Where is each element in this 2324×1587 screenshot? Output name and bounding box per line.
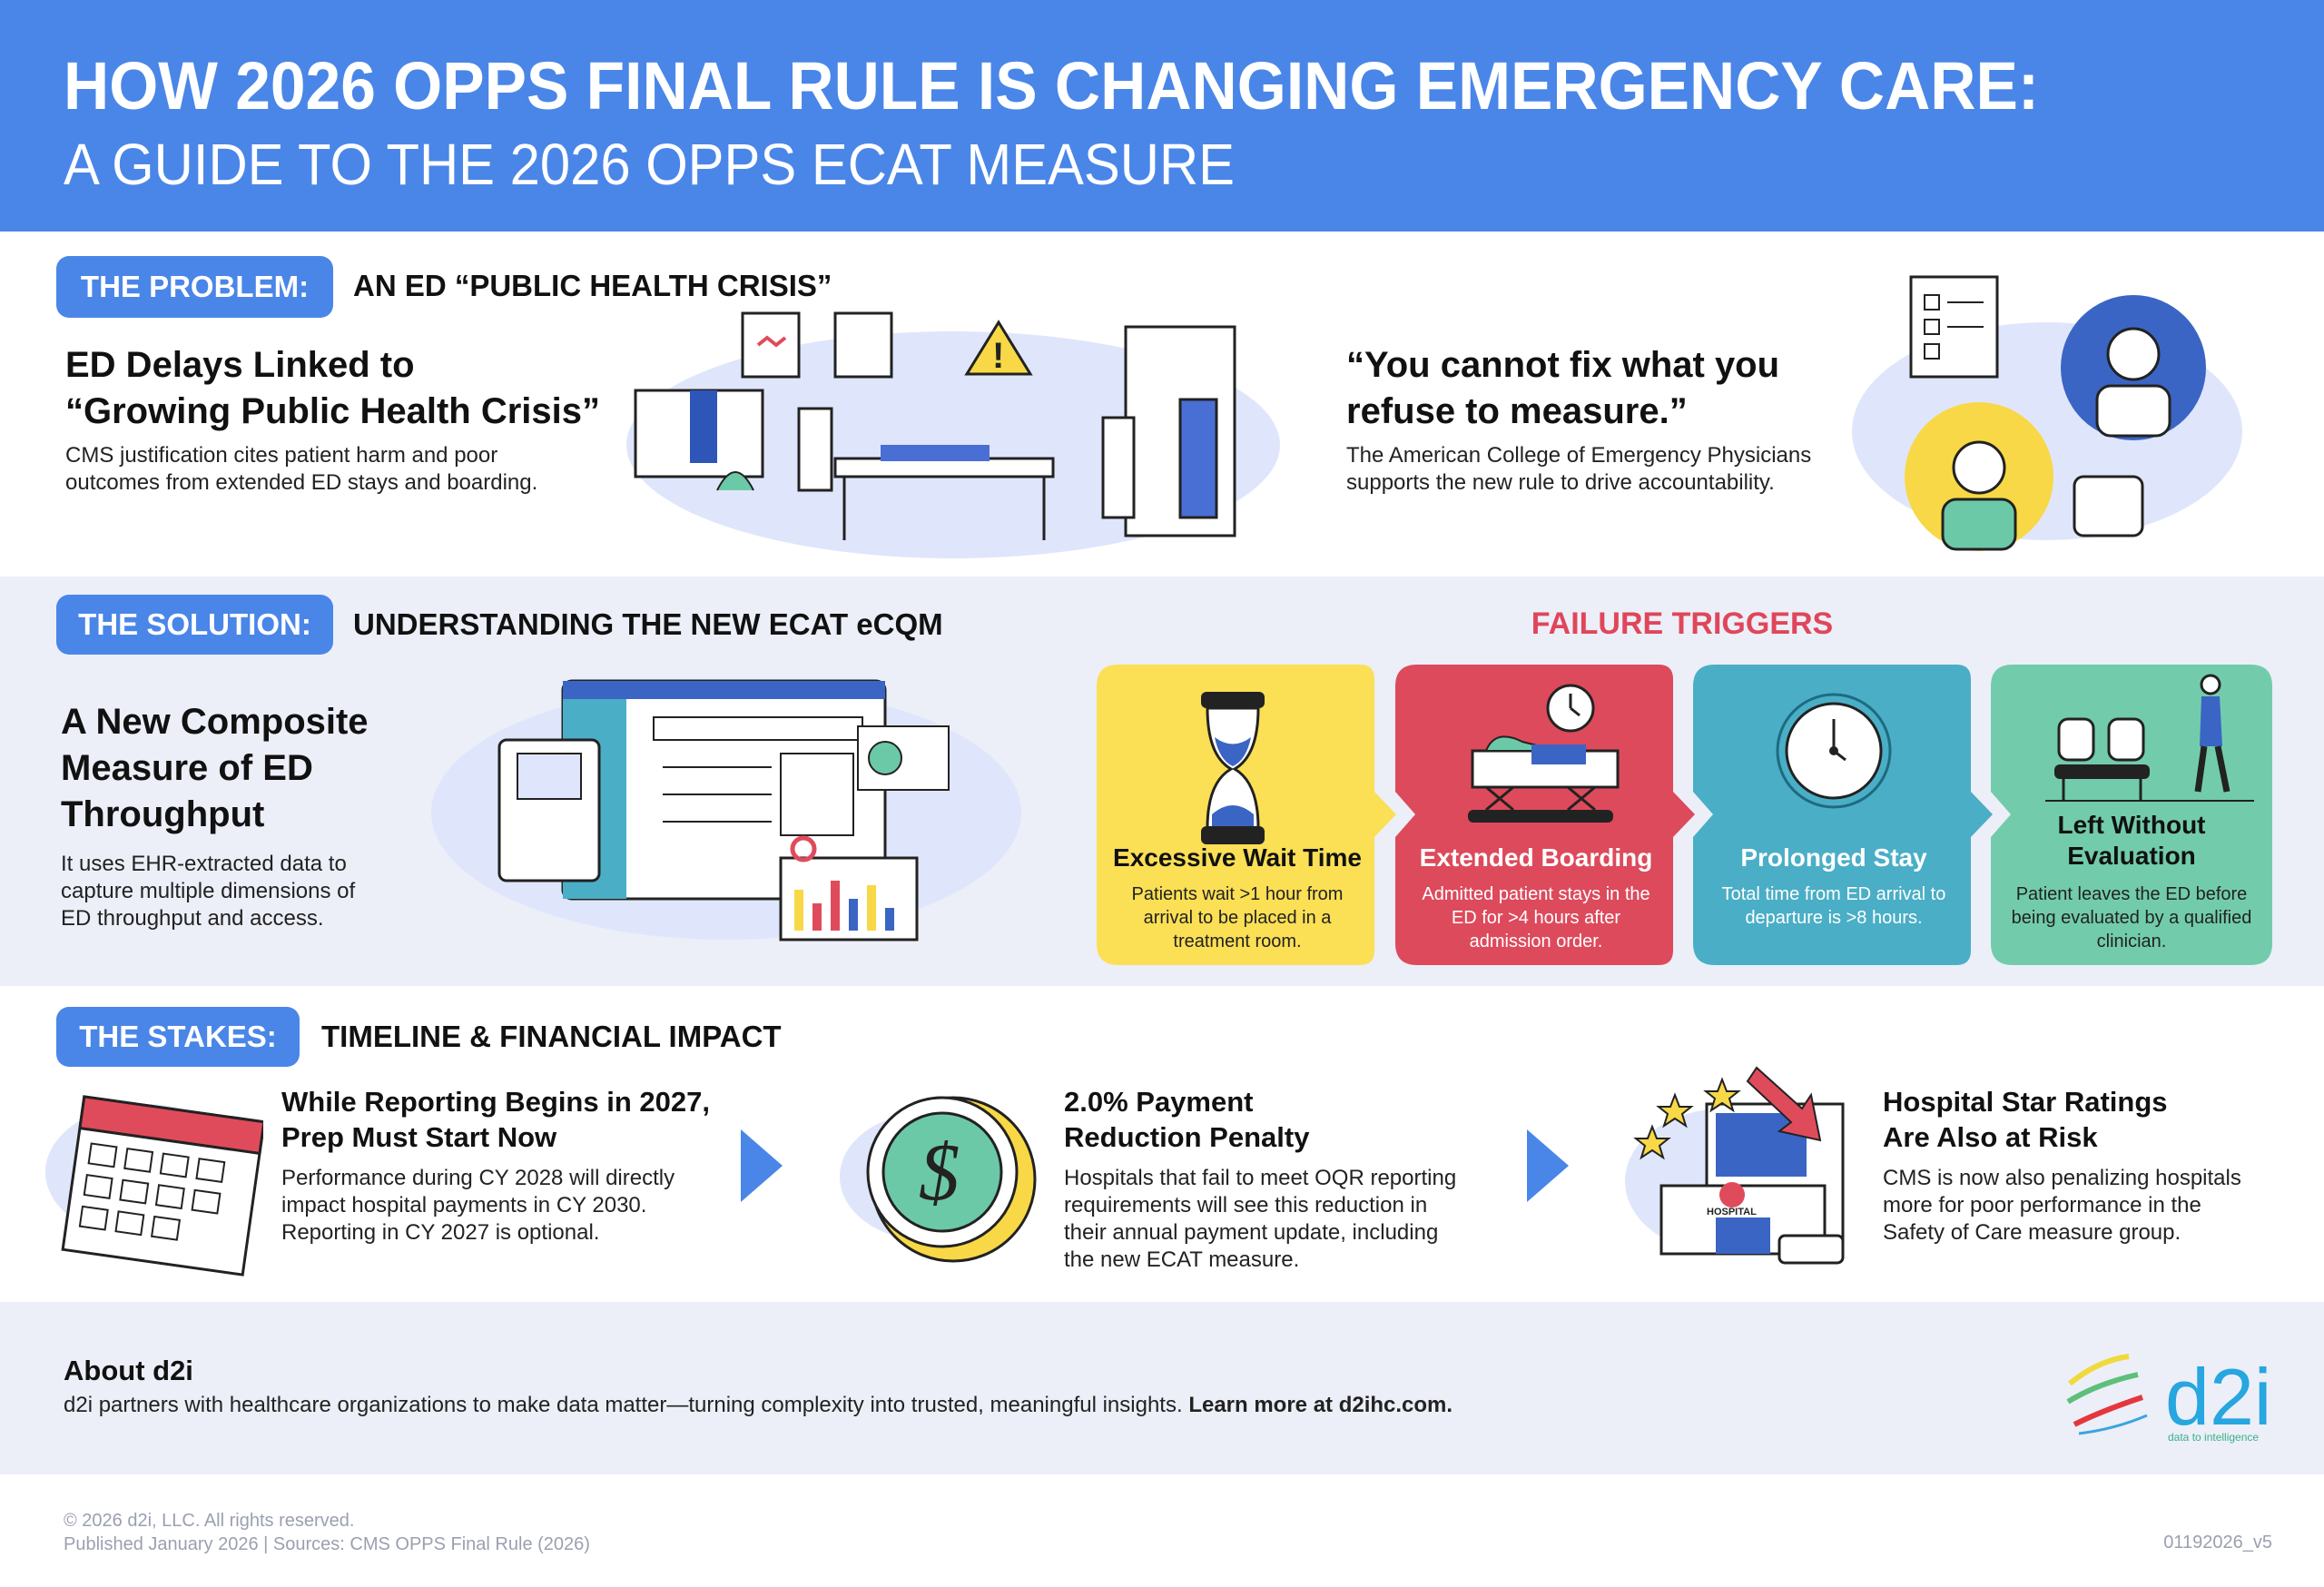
pill: the solution xyxy=(56,595,333,655)
text block: composite measure: It uses EHR-extracted data to xyxy=(61,852,347,876)
text block: composite measure: ED throughput and access. xyxy=(61,906,324,931)
heading: stakes: TIMELINE & FINANCIAL IMPACT xyxy=(321,1020,782,1053)
text block: composite measure: Throughput xyxy=(61,794,264,834)
illustration: dashboard xyxy=(431,679,1021,941)
text block: star ratings: Are Also at Risk xyxy=(1883,1121,2098,1153)
icon: clock xyxy=(1777,695,1890,807)
title: HOW 2026 OPPS FINAL RULE IS CHANGING EMERGENCY CARE: xyxy=(64,48,2039,123)
heading: failure triggers: FAILURE TRIGGERS xyxy=(1531,606,1833,641)
illustration: doctors xyxy=(1852,276,2242,551)
text block: payment penalty: 2.0% Payment xyxy=(1064,1086,1253,1118)
text block: star ratings: CMS is now also penalizing hospitals xyxy=(1883,1166,2241,1190)
text block: reporting timeline: Performance during CY 2028 will directly xyxy=(281,1166,675,1190)
footer: © 2026 d2i, LLC. All rights reserved. xyxy=(64,1511,354,1531)
quote block: refuse to measure.” xyxy=(1346,391,1688,431)
panel: about d2i xyxy=(0,1302,2324,1474)
card: excessive wait time: Patients wait >1 hour from arrival to be placed in a treatment room. xyxy=(1132,884,1343,951)
logo: d2i: data to intelligence xyxy=(2168,1431,2259,1444)
text block: payment penalty: requirements will see this reduction in xyxy=(1064,1193,1427,1217)
text block: reporting timeline: Reporting in CY 2027 is optional. xyxy=(281,1220,599,1245)
icon: calendar xyxy=(45,1095,263,1276)
text block: payment penalty: their annual payment update, including xyxy=(1064,1220,1438,1245)
quote block: supports the new rule to drive accountability. xyxy=(1346,470,1775,495)
panel: problem xyxy=(0,232,2324,577)
text block: payment penalty: Reduction Penalty xyxy=(1064,1121,1309,1153)
text block: reporting timeline: While Reporting Begins in 2027, xyxy=(281,1086,710,1118)
text block: ED delays: “Growing Public Health Crisis” xyxy=(65,391,600,431)
pill: the solution: THE SOLUTION: xyxy=(78,607,311,641)
text block: ED delays: ED Delays Linked to xyxy=(65,345,415,385)
text block: star ratings: Safety of Care measure group. xyxy=(1883,1220,2181,1245)
card: extended boarding: Admitted patient stays in the ED for >4 hours after admission order. xyxy=(1422,884,1650,951)
icon: dollar coin: $ xyxy=(919,1128,960,1217)
text block: composite measure: A New Composite xyxy=(61,702,369,742)
text block: ED delays xyxy=(65,345,600,495)
text block: reporting timeline xyxy=(281,1086,710,1245)
icon: hospital with stars xyxy=(1625,1066,1845,1264)
pill: the stakes xyxy=(56,1007,300,1067)
text block: about: d2i partners with healthcare organizations to make data matter—turning complexity into trusted, meaningful insights. Learn more at d2ihc.com. xyxy=(64,1393,1452,1417)
text block: reporting timeline: Prep Must Start Now xyxy=(281,1121,556,1153)
pill: the stakes: THE STAKES: xyxy=(79,1020,277,1053)
panel: solution xyxy=(0,577,2324,986)
logo: d2i xyxy=(2066,1352,2271,1444)
icon: hospital bed xyxy=(1468,685,1618,823)
text block: payment penalty: Hospitals that fail to meet OQR reporting xyxy=(1064,1166,1456,1190)
text block: reporting timeline: impact hospital payments in CY 2030. xyxy=(281,1193,646,1217)
card: excessive wait time: Excessive Wait Time xyxy=(1113,843,1362,872)
text block: composite measure: capture multiple dimensions of xyxy=(61,879,355,903)
logo: d2i: d2i xyxy=(2165,1352,2271,1442)
illustration: ED scene: ! xyxy=(992,336,1004,376)
card: left without evaluation: Evaluation xyxy=(2067,842,2196,870)
text block: star ratings xyxy=(1883,1086,2241,1245)
text block: payment penalty xyxy=(1064,1086,1456,1272)
text block: composite measure xyxy=(61,702,369,931)
icon: hourglass xyxy=(1201,692,1265,844)
footer: Published January 2026 | Sources: CMS OPPS Final Rule (2026) xyxy=(64,1534,590,1554)
panel: stakes xyxy=(0,986,2324,1302)
heading: about: About d2i xyxy=(64,1355,193,1386)
illustration: ED scene xyxy=(626,312,1280,558)
footer: version: 01192026_v5 xyxy=(2163,1533,2272,1552)
quote block: “You cannot fix what you xyxy=(1346,345,1779,385)
heading: problem: AN ED “PUBLIC HEALTH CRISIS” xyxy=(353,269,832,302)
text block: payment penalty: the new ECAT measure. xyxy=(1064,1247,1299,1272)
text block: ED delays: outcomes from extended ED stays and boarding. xyxy=(65,470,537,495)
card: prolonged stay xyxy=(1693,665,1993,965)
arrow xyxy=(741,1129,783,1202)
card: left without evaluation: Left Without xyxy=(2057,811,2206,839)
quote block: The American College of Emergency Physicians xyxy=(1346,443,1811,468)
card: excessive wait time xyxy=(1097,665,1396,965)
title xyxy=(64,48,2039,197)
text block: star ratings: Hospital Star Ratings xyxy=(1883,1086,2168,1118)
quote block xyxy=(1346,345,1811,495)
card: extended boarding: Extended Boarding xyxy=(1420,843,1652,872)
card: prolonged stay: Prolonged Stay xyxy=(1740,843,1927,872)
icon: hospital with stars: HOSPITAL xyxy=(1707,1207,1757,1217)
pill: the problem xyxy=(56,256,333,318)
text block: ED delays: CMS justification cites patient harm and poor xyxy=(65,443,497,468)
text block: star ratings: more for poor performance in the xyxy=(1883,1193,2201,1217)
header banner xyxy=(0,0,2324,232)
card: extended boarding xyxy=(1395,665,1695,965)
heading: solution: UNDERSTANDING THE NEW ECAT eCQM xyxy=(353,607,943,641)
icon: chairs and walking person xyxy=(2045,675,2254,801)
title: A GUIDE TO THE 2026 OPPS ECAT MEASURE xyxy=(64,132,1235,197)
icon: dollar coin xyxy=(840,1097,1037,1262)
arrow xyxy=(1527,1129,1569,1202)
text block: composite measure: Measure of ED xyxy=(61,748,313,788)
footer xyxy=(64,1511,590,1554)
pill: the problem: THE PROBLEM: xyxy=(81,270,309,303)
card: left without evaluation xyxy=(1991,665,2272,965)
card: prolonged stay: Total time from ED arrival to departure is >8 hours. xyxy=(1722,884,1945,928)
card: left without evaluation: Patient leaves the ED before being evaluated by a qualified clinician. xyxy=(2012,884,2251,951)
